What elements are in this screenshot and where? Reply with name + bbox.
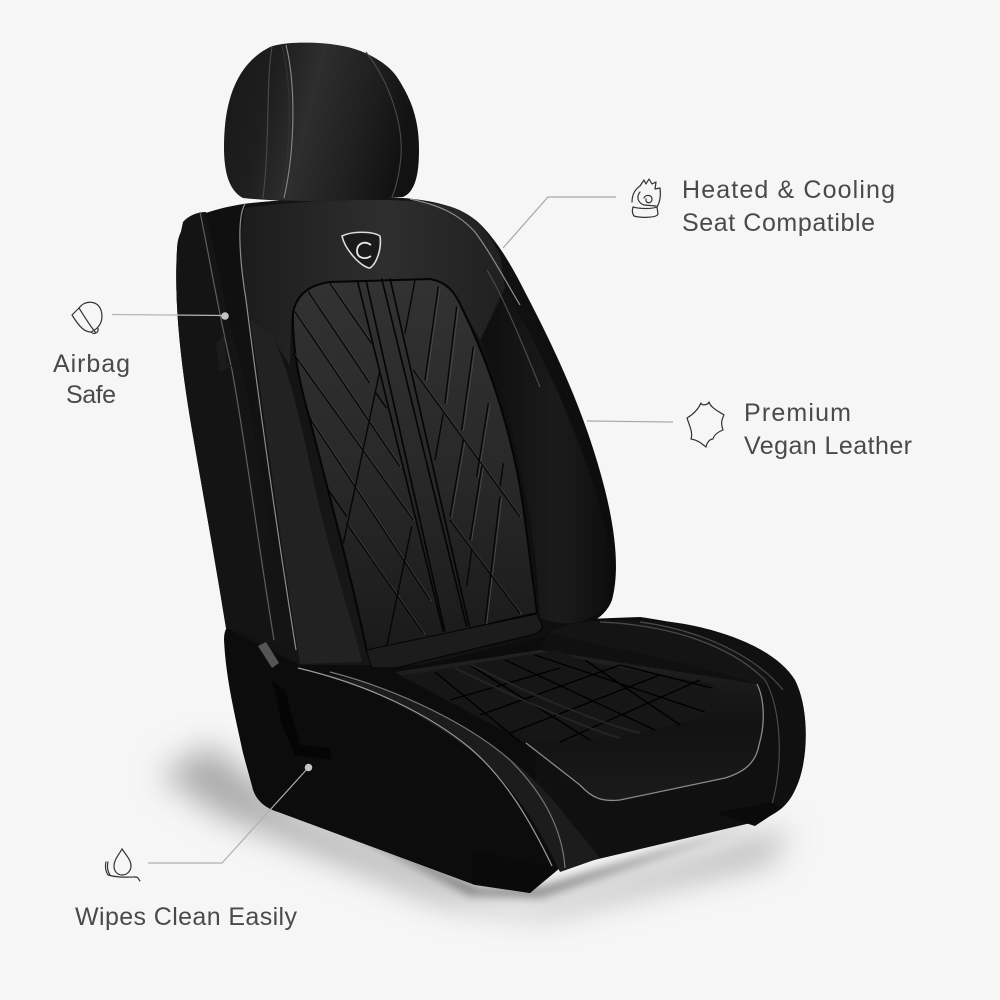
callout: airbag safe [53,302,229,409]
text: airbag safe [53,350,130,409]
lumbar crease [366,614,542,668]
text: vegan leather [744,399,912,460]
right bolster [482,290,610,623]
leader line [112,314,225,316]
icon: airbag [72,302,102,333]
headrest [224,43,419,201]
leader dot [221,312,229,320]
front feet [720,802,782,826]
leader line [587,421,673,422]
text: vegan leather: Vegan Leather [744,432,912,460]
callout: wipes clean [75,764,312,931]
backrest [176,198,616,665]
piping [200,199,540,650]
side adjuster [216,334,232,372]
logo badge [342,232,380,268]
text: heated and cooling: Heated & Cooling [682,176,895,204]
seat front cushion [395,650,763,800]
shoulder highlight [241,200,505,365]
seat cushion right bolster [535,620,806,868]
seat front-left bolster [285,668,600,893]
leader line [148,768,308,863]
centre quilted back panel [293,278,537,652]
seat mechanism [258,642,332,760]
seat floor shadow [160,745,790,915]
leader line [503,197,616,248]
text: airbag safe: Safe [66,381,116,409]
leader dot [305,764,312,771]
dark silhouette underlay [224,617,806,893]
inner left bolster [250,320,362,664]
seat illustration [176,43,806,893]
text: heated and cooling: Seat Compatible [682,209,875,237]
callout: heated and cooling [503,176,895,248]
text: vegan leather: Premium [744,399,851,427]
quilted seat cushion panel [400,650,721,742]
text: wipes clean: Wipes Clean Easily [75,903,298,931]
icon: leather hide [687,402,724,447]
text: airbag safe: Airbag [53,350,130,378]
callout: vegan leather [587,399,912,460]
text: heated and cooling [682,176,895,237]
left wing [176,212,290,650]
icon: flame and seat [632,179,660,217]
icon: water drop and wipe [105,849,140,881]
